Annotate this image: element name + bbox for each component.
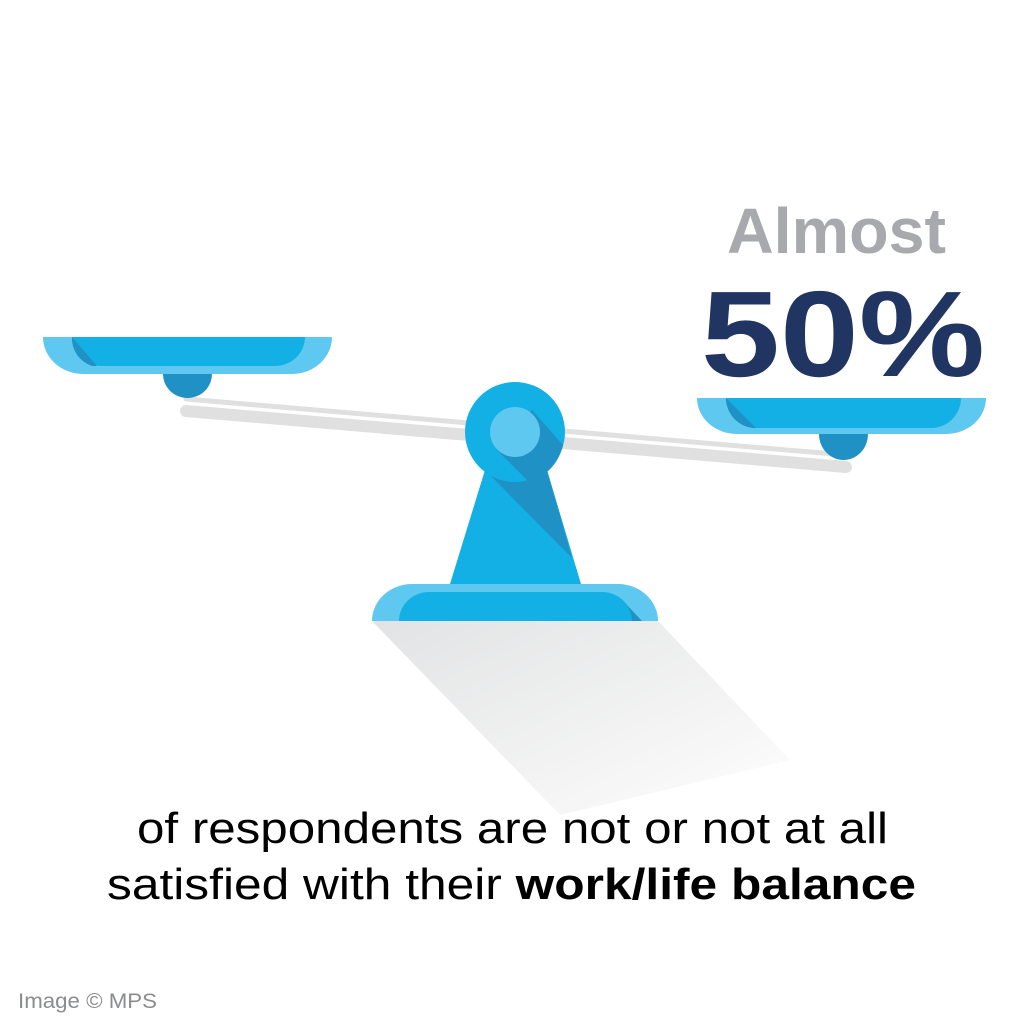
body text: satisfied with their work/life balance bbox=[107, 860, 916, 909]
credit: Image © MPS bbox=[18, 990, 157, 1013]
beam bbox=[186, 399, 846, 467]
heading: Almost: Almost bbox=[727, 195, 946, 267]
right pan bbox=[697, 398, 986, 460]
pivot stand bbox=[450, 382, 581, 584]
body text bbox=[107, 804, 916, 909]
heading: 50%: 50% bbox=[701, 266, 985, 402]
left pan bbox=[43, 337, 332, 398]
base shadow bbox=[372, 621, 790, 815]
body text: of respondents are not or not at all bbox=[137, 804, 888, 853]
base bbox=[372, 584, 658, 621]
